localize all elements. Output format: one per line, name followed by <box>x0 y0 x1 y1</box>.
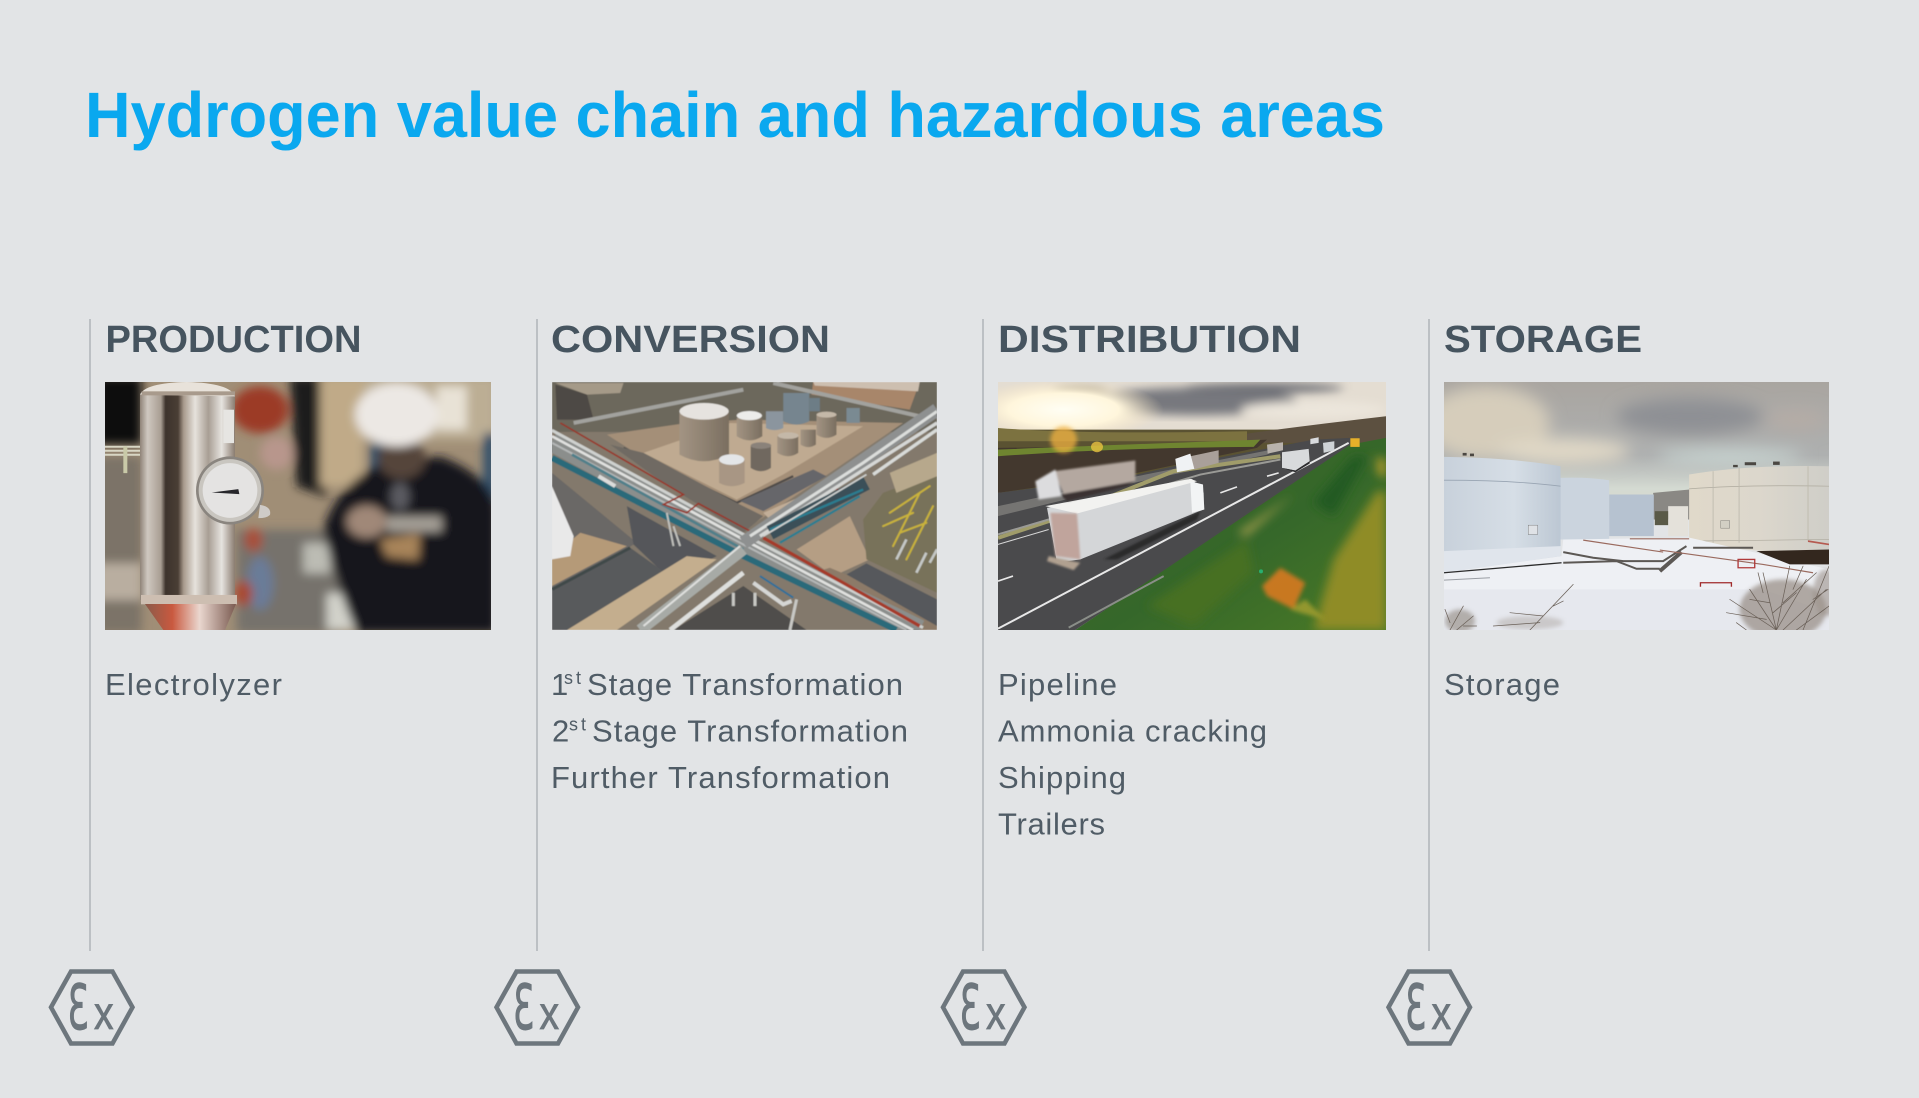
icon: Ex hazardous area mark: x <box>1432 988 1451 1040</box>
photo: white storage tanks in snow <box>1444 382 1829 630</box>
icon: Ex hazardous area mark: Ɛ <box>1405 972 1426 1044</box>
panel: storage <box>1388 319 1840 1044</box>
icon: Ex hazardous area mark: Ɛ <box>960 972 980 1044</box>
icon: Ex hazardous area mark: x <box>94 988 114 1040</box>
heading: production: PRODUCTION <box>106 319 362 361</box>
panel: conversion <box>496 319 937 1044</box>
list: distribution items: Trailers <box>998 806 1105 842</box>
icon: Ex hazardous area mark <box>51 972 132 1044</box>
heading: conversion: CONVERSION <box>551 319 830 361</box>
panel: distribution <box>943 319 1387 1044</box>
list: distribution items: Ammonia cracking <box>998 714 1267 748</box>
list: conversion items: Further Transformation <box>551 760 890 795</box>
icon: Ex hazardous area mark: Ɛ <box>68 972 88 1044</box>
list: distribution items <box>998 667 1267 842</box>
photo: electrolyzer gauge and worker <box>105 382 491 630</box>
icon: Ex hazardous area mark: Ɛ <box>513 972 534 1044</box>
photo: aerial view of plant with pipe racks <box>552 382 937 630</box>
icon: Ex hazardous area mark: x <box>986 988 1006 1040</box>
list: conversion items: st <box>569 714 586 734</box>
icon: Ex hazardous area mark: x <box>540 988 559 1040</box>
list: conversion items: st <box>564 668 581 688</box>
list: distribution items: Pipeline <box>998 667 1117 702</box>
list: conversion items: 2 <box>552 714 569 748</box>
heading: distribution: DISTRIBUTION <box>998 319 1301 361</box>
panel: production <box>51 319 497 1044</box>
list: conversion items: 1 <box>551 667 568 702</box>
list: conversion items <box>551 667 908 795</box>
list: distribution items: Shipping <box>998 760 1126 795</box>
heading: storage: STORAGE <box>1444 319 1642 361</box>
icon: Ex hazardous area mark <box>1388 972 1470 1044</box>
photo: trucks on a highway at sunset <box>998 382 1386 630</box>
icon: Ex hazardous area mark <box>496 972 578 1044</box>
list: production items: Electrolyzer <box>105 667 282 702</box>
title: Hydrogen value chain and hazardous areas <box>85 79 1385 151</box>
icon: Ex hazardous area mark <box>943 972 1024 1044</box>
list: storage items: Storage <box>1444 667 1560 702</box>
list: conversion items: Stage Transformation <box>587 667 903 702</box>
list: conversion items: Stage Transformation <box>592 714 908 748</box>
